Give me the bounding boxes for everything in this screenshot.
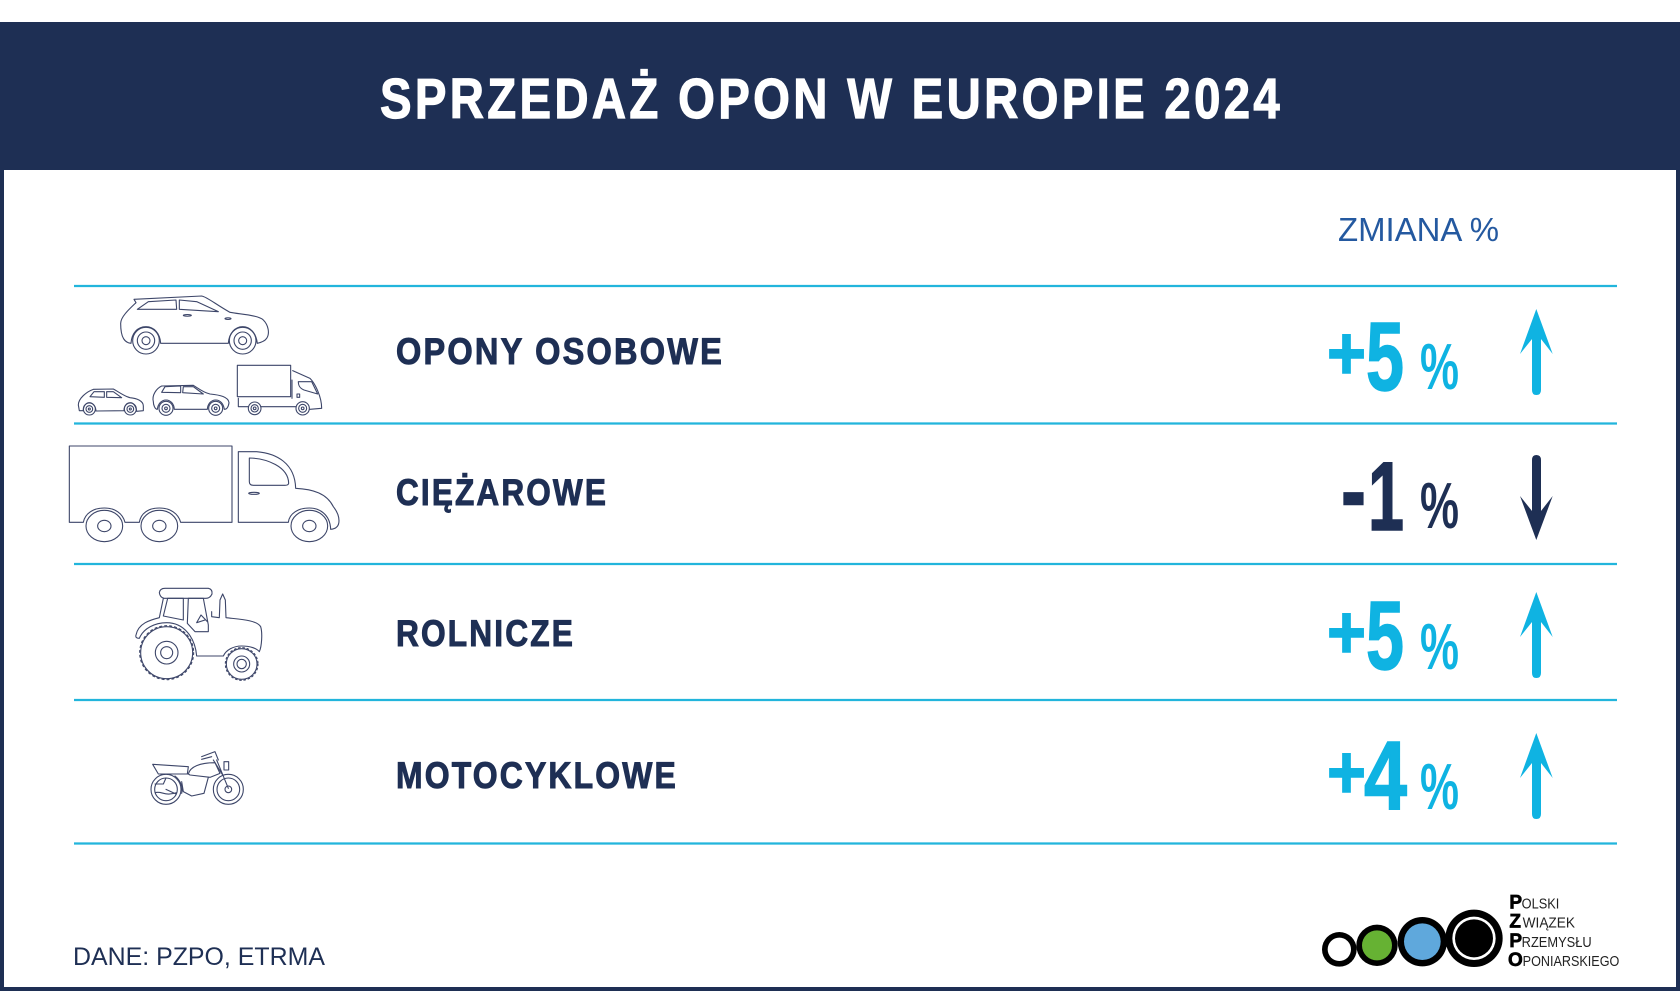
logo text bbox=[1508, 892, 1619, 971]
value: % bbox=[1420, 750, 1459, 823]
row: truck tyres bbox=[69, 436, 1553, 551]
logo text: OLSKI bbox=[1522, 896, 1559, 912]
value bbox=[1327, 581, 1459, 690]
icon: passenger cars and van bbox=[78, 296, 322, 415]
row: motorcycle tyres bbox=[151, 721, 1553, 830]
icon: motorcycle bbox=[151, 752, 243, 804]
logo: PZPO bbox=[1322, 892, 1619, 971]
title: SPRZEDAŻ OPON W EUROPIE 2024 bbox=[380, 67, 1283, 131]
value: + bbox=[1327, 311, 1366, 395]
value: + bbox=[1327, 590, 1366, 674]
value: 1 bbox=[1368, 442, 1404, 551]
logo text: PONIARSKIEGO bbox=[1523, 954, 1619, 970]
arrow up bbox=[1520, 733, 1553, 819]
arrow down bbox=[1520, 455, 1553, 540]
row: passenger tyres bbox=[78, 296, 1553, 415]
value: 5 bbox=[1366, 302, 1404, 411]
value bbox=[1327, 721, 1459, 830]
icon: tractor bbox=[136, 588, 262, 680]
column heading: change percent: ZMIANA % bbox=[1338, 211, 1499, 248]
value bbox=[1341, 436, 1459, 551]
arrow up bbox=[1520, 592, 1553, 678]
row: agricultural tyres bbox=[136, 581, 1553, 690]
logo text: Z bbox=[1509, 912, 1521, 933]
logo text: P bbox=[1509, 931, 1522, 952]
value: % bbox=[1420, 469, 1459, 542]
label: OPONY OSOBOWE bbox=[396, 331, 724, 372]
label: CIĘŻAROWE bbox=[396, 472, 608, 513]
value: 5 bbox=[1366, 581, 1404, 690]
icon: truck bbox=[69, 446, 339, 542]
value: % bbox=[1420, 610, 1459, 683]
source note: DANE: PZPO, ETRMA bbox=[73, 943, 325, 971]
arrow up bbox=[1520, 309, 1553, 395]
header band bbox=[0, 22, 1680, 170]
logo rings bbox=[1322, 910, 1503, 967]
value: % bbox=[1420, 330, 1459, 403]
logo text: RZEMYSŁU bbox=[1522, 935, 1592, 951]
value bbox=[1327, 302, 1459, 411]
logo text: P bbox=[1509, 892, 1522, 913]
logo text: O bbox=[1508, 950, 1523, 971]
value: + bbox=[1327, 730, 1366, 814]
value: - bbox=[1341, 436, 1366, 545]
logo text: WIĄZEK bbox=[1523, 916, 1575, 932]
label: MOTOCYKLOWE bbox=[396, 755, 678, 796]
label: ROLNICZE bbox=[396, 613, 575, 654]
value: 4 bbox=[1364, 721, 1407, 830]
